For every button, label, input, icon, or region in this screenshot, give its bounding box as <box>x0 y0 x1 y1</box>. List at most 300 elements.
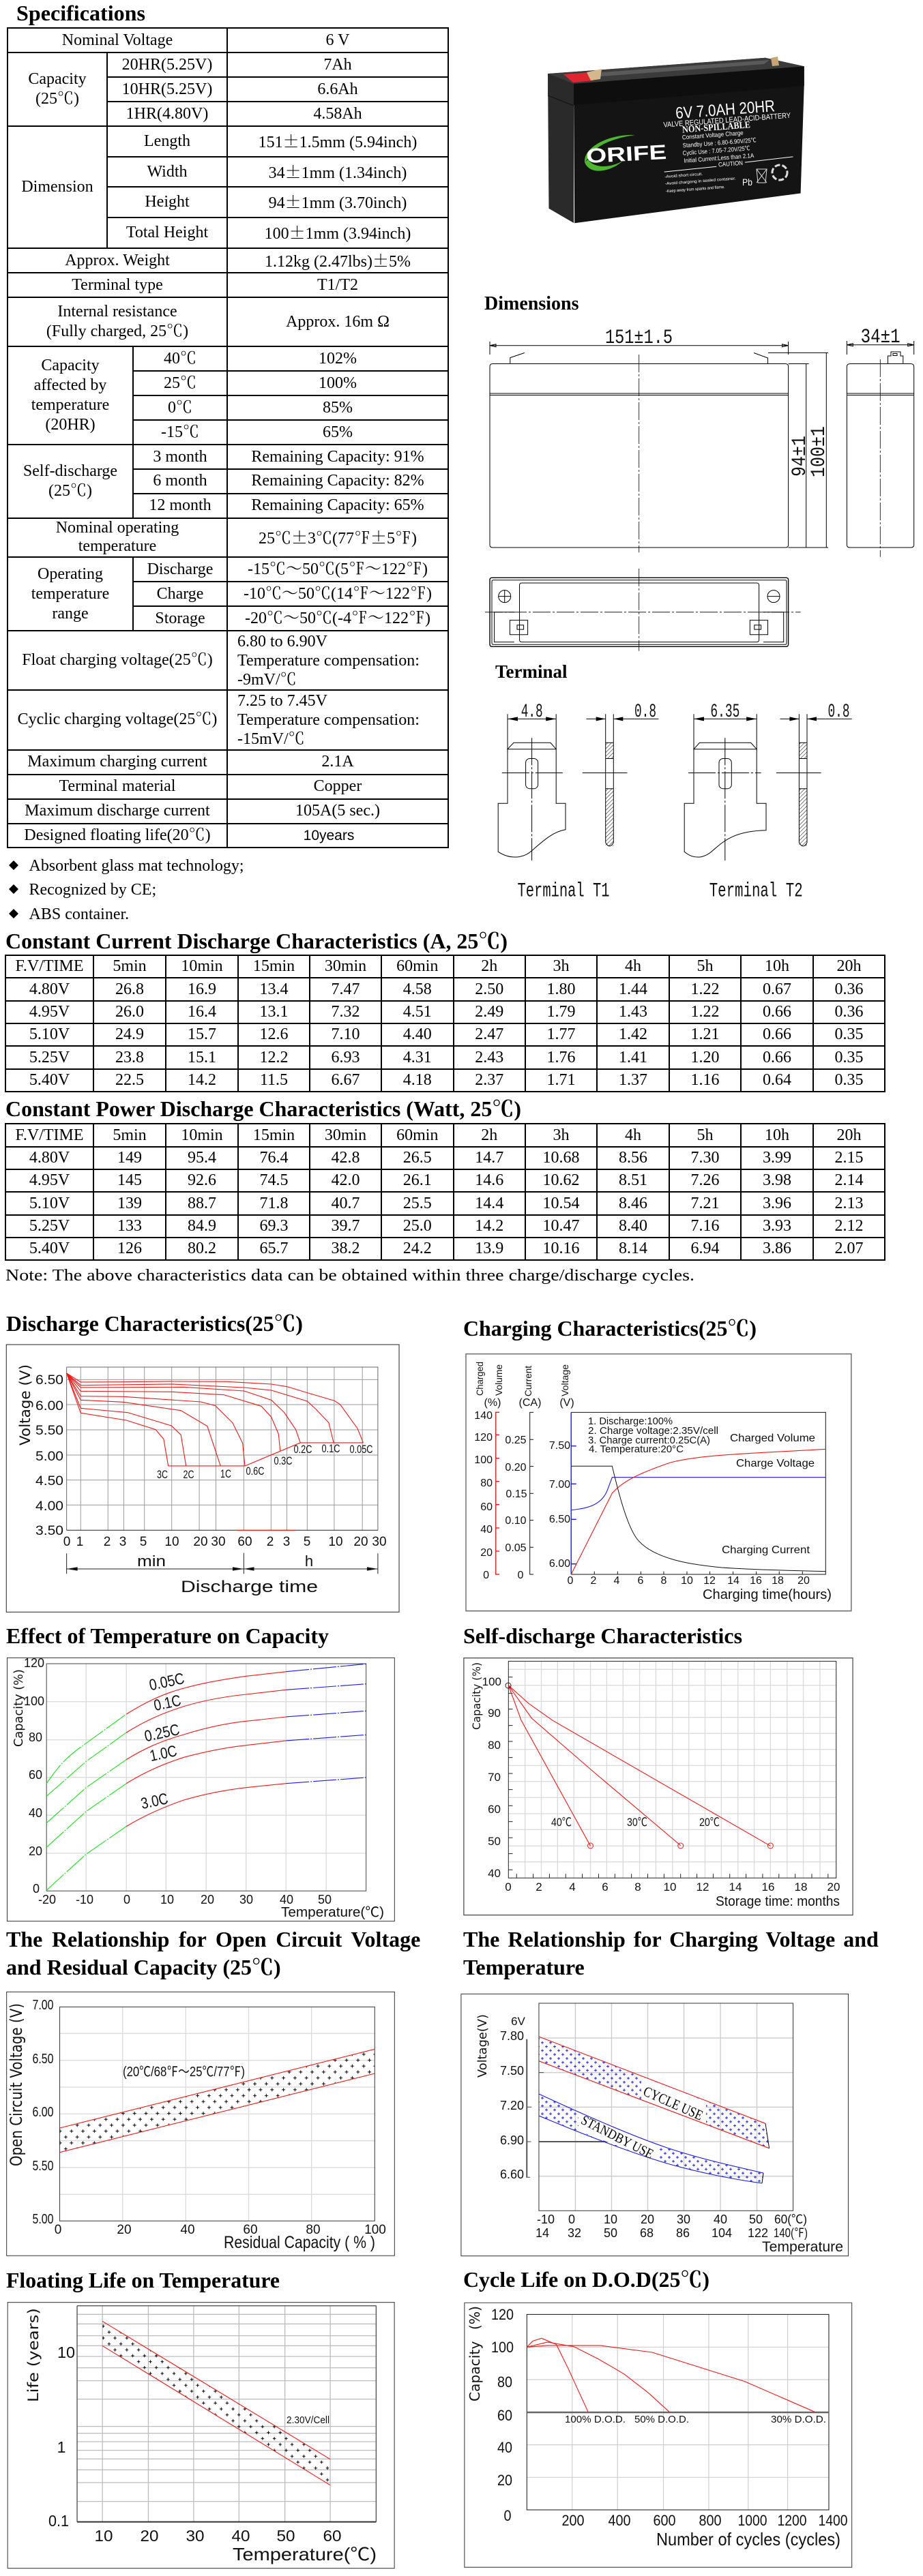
constant current discharge table: 30min <box>325 957 366 975</box>
axis labels and notes: 0.15 <box>506 1488 527 1500</box>
constant power discharge table: 3.99 <box>763 1149 791 1167</box>
constant power discharge table: 149 <box>117 1149 142 1167</box>
axis and band labels: 5.50 <box>33 2159 53 2174</box>
axis labels <box>25 2308 377 2564</box>
specifications table: Designed floating life(20℃) <box>24 826 211 844</box>
axis labels and notes: (CA) <box>519 1397 541 1409</box>
heading: charging voltage relationship: Temperature <box>463 1955 585 1979</box>
curve rate labels: 0.05C <box>349 1443 372 1456</box>
constant power discharge table: 71.8 <box>259 1195 288 1212</box>
constant power discharge table: 76.4 <box>259 1149 288 1167</box>
terminal T1 side section <box>583 702 658 846</box>
specifications table: 100% <box>319 374 357 391</box>
specifications table: (25℃) <box>48 482 92 500</box>
specifications table: -10℃～50℃(14℉～122℉) <box>244 585 432 603</box>
axis and curve labels: 80 <box>497 2373 512 2391</box>
axis labels and notes: Volume <box>493 1364 504 1396</box>
constant current discharge table: 4.58 <box>403 980 432 998</box>
axis and line labels: 12 <box>697 1881 709 1893</box>
axis and curve labels: 120 <box>24 1656 44 1670</box>
constant current discharge table: 26.8 <box>115 980 144 998</box>
axis and line labels: 14 <box>729 1881 742 1893</box>
axis labels: 7.20 <box>500 2099 524 2112</box>
constant power discharge table: 10.54 <box>543 1195 580 1212</box>
axis and band labels: 7.00 <box>33 1998 53 2013</box>
specifications table: 7Ah <box>323 56 352 74</box>
axis and band labels: Residual Capacity ( % ) <box>224 2233 375 2252</box>
axis labels and notes: 20 <box>797 1575 810 1587</box>
constant power discharge table: 38.2 <box>332 1240 360 1257</box>
constant current discharge table: 6.67 <box>332 1071 360 1089</box>
specifications table: Temperature compensation: <box>237 711 420 729</box>
specifications table: 7.25 to 7.45V <box>237 692 327 710</box>
time range arrows <box>67 1553 378 1574</box>
axis labels: 10 <box>164 1535 179 1549</box>
constant current discharge table: 4.18 <box>403 1071 432 1089</box>
chart: charging voltage vs temperature <box>461 1994 848 2256</box>
constant current discharge table: 0.35 <box>835 1071 864 1089</box>
axis and line labels: 2 <box>536 1881 542 1893</box>
axis labels and notes: 3. Charge current:0.25C(A) <box>588 1435 710 1446</box>
constant power discharge table: 3.98 <box>763 1171 791 1189</box>
specifications table: (Fully charged, 25℃) <box>46 323 188 340</box>
heading: effect of temperature: Effect of Temperature on Capacity <box>6 1623 329 1648</box>
axis labels: 86 <box>676 2226 690 2240</box>
battery label text: 6V 7.0AH 20HR <box>675 97 776 123</box>
specifications table: 10HR(5.25V) <box>122 80 212 98</box>
specifications table: -15℃ <box>161 423 199 440</box>
axis and curve labels: 20 <box>29 1844 42 1858</box>
axis labels: 30 <box>211 1535 226 1549</box>
axis and curve labels: 3.0C <box>139 1789 170 1812</box>
axis labels and notes: 12 <box>703 1575 716 1587</box>
constant power discharge table: 8.14 <box>619 1240 647 1257</box>
axis labels: 60(℃) <box>774 2213 807 2226</box>
constant current discharge table: 1.79 <box>547 1003 576 1021</box>
constant power discharge table: 2.13 <box>835 1195 864 1212</box>
specifications table: 100±1mm (3.94inch) <box>265 220 411 243</box>
constant current discharge table: 0.66 <box>763 1049 791 1066</box>
axis and curve labels <box>467 2306 847 2549</box>
specifications table: Terminal material <box>59 777 175 795</box>
drawing: terminal T1: Terminal T1 <box>517 880 610 903</box>
constant power discharge table: 10.47 <box>543 1217 580 1235</box>
chart: discharge characteristics <box>6 1345 399 1612</box>
axis labels: 3 <box>119 1535 126 1549</box>
specifications table: Storage <box>155 610 205 627</box>
constant power discharge table: 145 <box>117 1171 142 1189</box>
specifications table: Terminal type <box>72 275 163 293</box>
specifications table: Charge <box>157 585 203 603</box>
axis and curve labels: -10 <box>76 1893 93 1906</box>
specifications table: (20HR) <box>45 416 96 434</box>
axis and curve labels: 800 <box>699 2512 722 2529</box>
frame and grid <box>465 2303 852 2567</box>
specifications table: Approx. Weight <box>65 251 170 269</box>
constant current discharge table: 6.93 <box>332 1049 360 1066</box>
specifications table: Float charging voltage(25℃) <box>22 651 213 669</box>
voltage band <box>60 2049 375 2153</box>
axis labels and notes: 0.05 <box>505 1542 527 1554</box>
axis labels and notes: Charging time(hours) <box>703 1587 832 1602</box>
constant power discharge table: 74.5 <box>259 1171 288 1189</box>
axis and band labels: 6.00 <box>33 2105 53 2120</box>
constant current discharge table: 2.49 <box>475 1003 503 1021</box>
constant power discharge table: 60min <box>396 1126 438 1144</box>
logo wordmark: ORIFE <box>585 141 667 168</box>
specifications table: Length <box>144 132 190 150</box>
constant power discharge table: 5.40V <box>29 1240 70 1257</box>
constant current discharge table: 3h <box>553 957 569 975</box>
specifications table: range <box>52 604 89 622</box>
curve rate labels: 1C <box>220 1467 231 1480</box>
axis labels: 5 <box>140 1535 147 1549</box>
constant current discharge table: 4.95V <box>29 1003 70 1021</box>
axis labels and notes: 120 <box>474 1432 493 1443</box>
axis labels and notes: 8 <box>661 1575 667 1587</box>
axis labels <box>475 2014 843 2255</box>
axis and line labels: 4 <box>569 1881 576 1893</box>
specifications table: -9mV/℃ <box>237 671 297 689</box>
specifications table: Nominal Voltage <box>62 31 173 49</box>
specifications table: -15℃～50℃(5℉～122℉) <box>248 560 428 578</box>
specifications table: Maximum discharge current <box>25 802 210 820</box>
specifications table: affected by <box>34 376 106 394</box>
drawing: terminal T2: Terminal T2 <box>709 880 803 903</box>
curve rate labels <box>157 1442 372 1481</box>
specifications table: 0℃ <box>168 398 192 416</box>
axis labels: 6.00 <box>35 1399 63 1413</box>
axis and curve labels: 20 <box>497 2472 512 2489</box>
constant current discharge table: 1.76 <box>547 1049 576 1066</box>
axis labels: Discharge time <box>181 1578 318 1596</box>
specifications table <box>7 27 449 848</box>
axis labels: 7.80 <box>500 2029 524 2043</box>
constant current discharge table: 60min <box>396 957 438 975</box>
constant power discharge table: 5.25V <box>29 1217 70 1235</box>
axis and line labels: 90 <box>488 1707 501 1720</box>
axis labels and notes: Charge Voltage <box>736 1458 815 1469</box>
specifications table: 94±1mm (3.70inch) <box>269 189 407 213</box>
chart: self-discharge characteristics <box>464 1658 853 1915</box>
axis and band labels: Open Circuit Voltage (V) <box>7 2003 26 2166</box>
constant current discharge table: 7.47 <box>332 980 360 998</box>
specifications table: -15mV/℃ <box>237 730 305 748</box>
standby use band: STANDBY USE <box>578 2113 656 2162</box>
specifications table: 20HR(5.25V) <box>122 56 212 74</box>
constant current discharge table: 5min <box>113 957 147 975</box>
heading: open circuit voltage relationship <box>6 1927 420 1979</box>
constant power discharge table: 14.6 <box>475 1171 503 1189</box>
axis and curve labels: 1.0C <box>148 1741 179 1765</box>
heading: terminal: Terminal <box>495 661 568 682</box>
constant current discharge table: 20h <box>836 957 861 975</box>
axis labels and notes: 7.00 <box>549 1479 570 1491</box>
axis labels and notes: 6.50 <box>549 1514 570 1525</box>
axis labels: 60 <box>323 2527 341 2545</box>
axis labels: 20 <box>141 2527 158 2545</box>
constant power discharge table: 133 <box>117 1217 142 1235</box>
constant power discharge table: 84.9 <box>188 1217 216 1235</box>
axis labels: 20 <box>641 2213 654 2226</box>
constant current discharge table: 1.77 <box>547 1025 576 1043</box>
constant current discharge table: 24.9 <box>115 1025 144 1043</box>
axis and curve labels: 0 <box>123 1893 130 1906</box>
axis and line labels: 60 <box>488 1803 501 1816</box>
axis and curve labels: Capacity (%) <box>467 2306 483 2401</box>
heading: dimensions: Dimensions <box>484 293 579 314</box>
constant power discharge table: 15min <box>253 1126 295 1144</box>
heading: discharge characteristics: Discharge Characteristics(25℃) <box>6 1311 303 1336</box>
discharge lines <box>508 1686 770 1846</box>
axis and curve labels <box>12 1656 384 1920</box>
constant current discharge table: 0.36 <box>835 980 864 998</box>
specifications table: 6 month <box>153 472 207 490</box>
charging curves <box>571 1449 825 1574</box>
specifications table: 40℃ <box>164 349 196 367</box>
constant power discharge table: 42.8 <box>332 1149 360 1167</box>
specifications table: Operating <box>38 565 103 582</box>
constant power discharge table: 7.30 <box>690 1149 719 1167</box>
constant current discharge table: 2.37 <box>475 1071 503 1089</box>
cycle use band: CYCLE USE <box>641 2083 705 2123</box>
axis labels and notes: 14 <box>727 1575 739 1587</box>
axis and curve labels: 0.1C <box>152 1691 183 1714</box>
constant power discharge table: 14.4 <box>475 1195 503 1212</box>
specifications table: Maximum charging current <box>27 753 207 770</box>
constant current discharge table: 2.50 <box>475 980 503 998</box>
axis labels: 50 <box>749 2213 763 2226</box>
specifications table: Nominal operating <box>56 519 179 537</box>
constant current discharge table: 16.4 <box>188 1003 216 1021</box>
axis labels: 10 <box>57 2343 75 2361</box>
axis labels: 4.50 <box>35 1474 63 1488</box>
constant current discharge table: 4.40 <box>403 1025 432 1043</box>
side view: 34±1 <box>861 326 900 349</box>
axis labels: 2 <box>104 1535 111 1549</box>
constant power discharge table: 4.95V <box>29 1171 70 1189</box>
axis and curve labels: 400 <box>609 2512 630 2529</box>
battery label text: Initial Current:Less than 2.1A <box>684 152 754 164</box>
heading: constant current discharge: Constant Current Discharge Characteristics (A, 25℃) <box>5 929 508 953</box>
battery label text: -Avoid chargong in sealed container. <box>665 177 736 186</box>
axis and band labels <box>7 1998 386 2252</box>
axis and curve labels: Capacity (%) <box>12 1669 26 1747</box>
constant power discharge table: 10.62 <box>543 1171 580 1189</box>
axis and band labels: 40 <box>180 2223 195 2237</box>
constant current discharge table: 13.1 <box>259 1003 288 1021</box>
terminal T1 side section: 0.8 <box>634 702 656 723</box>
battery label text: -Keep away from sparks and flame. <box>666 185 725 194</box>
feature bullet list: Recognized by CE; <box>29 881 156 899</box>
curve rate labels: 2C <box>183 1468 194 1481</box>
axis labels and notes: 60 <box>480 1501 493 1513</box>
axis and band labels: (20℃/68℉～25℃/77℉) <box>123 2065 245 2080</box>
constant current discharge table: 2h <box>481 957 497 975</box>
axis labels: h <box>305 1553 313 1570</box>
axis and line labels: 20℃ <box>699 1816 720 1829</box>
specifications table: Total Height <box>126 224 208 241</box>
axis labels: 1 <box>57 2438 65 2456</box>
constant power discharge table: 39.7 <box>332 1217 360 1235</box>
axis and curve labels: 1000 <box>738 2512 767 2529</box>
heading: constant power discharge: Constant Power Discharge Characteristics (Watt, 25℃) <box>5 1096 521 1121</box>
drawing: terminal T2: 6.35 <box>710 702 739 723</box>
axis and curve labels: 100 <box>24 1694 44 1708</box>
axis labels: 4.00 <box>35 1499 63 1514</box>
specifications table: Copper <box>314 777 362 795</box>
life band <box>102 2321 330 2485</box>
side view <box>847 326 914 557</box>
axis and curve labels: 20 <box>201 1893 214 1906</box>
specifications table: 85% <box>323 398 353 416</box>
axis labels and notes: Charged Volume <box>730 1433 815 1444</box>
axis and line labels: 40℃ <box>551 1816 572 1829</box>
drawing: terminal T1 <box>498 702 658 903</box>
axis and curve labels: 200 <box>562 2512 584 2529</box>
axis and curve labels: 30 <box>239 1893 253 1906</box>
axis and curve labels: 0 <box>33 1882 40 1896</box>
axis labels and notes: 0 <box>518 1570 524 1581</box>
cycle use band <box>539 2037 770 2148</box>
chart: effect of temperature on capacity <box>8 1656 394 1921</box>
specifications table: (25℃) <box>35 90 79 108</box>
specifications table: -20℃～50℃(-4℉～122℉) <box>245 610 430 627</box>
constant current discharge table: 0.67 <box>763 980 791 998</box>
specifications table: 2.1A <box>321 753 354 770</box>
axis and curve labels: 10 <box>160 1893 174 1906</box>
axis labels and notes: 40 <box>480 1524 493 1536</box>
curve rate labels: 0.2C <box>293 1443 312 1456</box>
axis labels: 20 <box>193 1535 208 1549</box>
axis labels: 6.50 <box>35 1373 63 1388</box>
axis and line labels: 80 <box>488 1739 501 1752</box>
axis and curve labels: 60 <box>29 1768 42 1782</box>
axis labels: 30 <box>372 1535 387 1549</box>
axis and curve labels: 40 <box>280 1893 293 1906</box>
axis and line labels: Storage time: months <box>716 1894 840 1909</box>
standby use band <box>539 2094 763 2183</box>
constant current discharge table: 15.7 <box>188 1025 216 1043</box>
feature bullet list <box>9 857 244 923</box>
axis labels: min <box>137 1553 166 1570</box>
axis labels: 7.50 <box>500 2064 524 2078</box>
constant current discharge table: 7.32 <box>332 1003 360 1021</box>
chart: charging characteristics <box>466 1354 851 1611</box>
specifications table: 65% <box>323 423 353 440</box>
axis labels and notes: 20 <box>480 1547 493 1559</box>
axis labels: 0 <box>568 2213 575 2226</box>
axis labels: 14 <box>536 2226 549 2240</box>
constant current discharge table: 0.35 <box>835 1025 864 1043</box>
axis and line labels: 16 <box>762 1881 774 1893</box>
constant current discharge table: 1.37 <box>619 1071 647 1089</box>
battery label text: -Avoid short circuit. <box>664 173 703 179</box>
top view <box>485 569 801 651</box>
axis and curve labels: 100 <box>491 2339 514 2356</box>
specifications table: Remaining Capacity: 82% <box>251 472 424 490</box>
constant power discharge table: 4.80V <box>29 1149 70 1167</box>
axis labels: 2 <box>267 1535 274 1549</box>
axis and line labels: 18 <box>795 1881 807 1893</box>
axis labels: 122 <box>748 2226 768 2240</box>
axis labels and notes: 4. Temperature:20°C <box>589 1443 684 1455</box>
constant current discharge table: 23.8 <box>115 1049 144 1066</box>
constant current discharge table: 5h <box>697 957 714 975</box>
constant power discharge table: 2.15 <box>835 1149 864 1167</box>
battery label text: Standby Use : 6.80-6.90V/25℃ <box>682 136 757 149</box>
constant power discharge table: 20h <box>836 1126 861 1144</box>
specifications table: Remaining Capacity: 65% <box>251 496 424 514</box>
constant power discharge table: 3.93 <box>763 1217 791 1235</box>
frame, grid and ticks <box>464 1658 853 1915</box>
specifications table: Width <box>147 162 188 180</box>
curve rate labels: 0.1C <box>322 1442 340 1455</box>
axis and line labels: 50 <box>488 1835 501 1848</box>
constant current discharge table: 1.22 <box>690 980 719 998</box>
constant current discharge table: 4h <box>625 957 641 975</box>
axis and line labels: 10 <box>664 1881 676 1893</box>
end point markers <box>506 1683 773 1848</box>
constant current discharge table: 16.9 <box>188 980 216 998</box>
constant power discharge table: 14.2 <box>475 1217 503 1235</box>
battery label text <box>659 95 796 194</box>
feature bullet list: Absorbent glass mat technology; <box>29 857 244 875</box>
battery label text: Cyclic Use : 7.05-7.20V/25℃ <box>682 145 750 157</box>
axis labels: 5.50 <box>35 1424 63 1438</box>
constant power discharge table: 8.40 <box>619 1217 647 1235</box>
constant current discharge table: 1.42 <box>619 1025 647 1043</box>
constant current discharge table: 2.47 <box>475 1025 503 1043</box>
constant power discharge table: 30min <box>325 1126 366 1144</box>
constant current discharge table: 5.10V <box>29 1025 70 1043</box>
axis labels: 5.00 <box>35 1450 63 1464</box>
chart: cycle life on depth of discharge <box>465 2303 852 2567</box>
frame and grid <box>8 1658 394 1921</box>
drawing: battery dimensions <box>485 326 914 651</box>
constant power discharge table: 8.46 <box>619 1195 647 1212</box>
constant current discharge table: F.V/TIME <box>15 957 84 975</box>
discharge curves <box>67 1373 363 1466</box>
axis and band labels: 60 <box>243 2223 258 2237</box>
constant power discharge table: 69.3 <box>259 1217 288 1235</box>
constant power discharge table: 25.0 <box>403 1217 432 1235</box>
axis labels: 30 <box>186 2527 205 2545</box>
product photo: battery <box>548 57 804 223</box>
axis labels: Voltage (V) <box>17 1364 33 1446</box>
axis and curve labels: Temperature(℃) <box>281 1905 384 1920</box>
constant power discharge table: 26.1 <box>403 1171 432 1189</box>
constant current discharge table: 2.43 <box>475 1049 503 1066</box>
front view <box>490 342 828 552</box>
terminal T2 side section: 0.8 <box>828 702 850 723</box>
note text: Note: The above characteristics data can be obtained within three charge/discharge cycles. <box>5 1267 694 1285</box>
axis labels: Temperature(℃) <box>233 2544 377 2564</box>
axis labels: 68 <box>640 2226 654 2240</box>
constant power discharge table: 10.16 <box>543 1240 580 1257</box>
axis and line labels: 30℃ <box>627 1816 647 1829</box>
curve rate labels: 0.3C <box>274 1454 292 1467</box>
constant power discharge table: 25.5 <box>403 1195 432 1212</box>
constant power discharge table: F.V/TIME <box>15 1126 84 1144</box>
axis and band labels: 5.00 <box>33 2212 53 2227</box>
constant current discharge table: 13.4 <box>259 980 288 998</box>
constant current discharge table: 10h <box>765 957 789 975</box>
capacity curves <box>46 1664 366 1890</box>
axis labels: 2.30V/Cell <box>287 2414 329 2426</box>
axis labels: 32 <box>568 2226 581 2240</box>
axis and line labels: 0 <box>505 1881 512 1893</box>
